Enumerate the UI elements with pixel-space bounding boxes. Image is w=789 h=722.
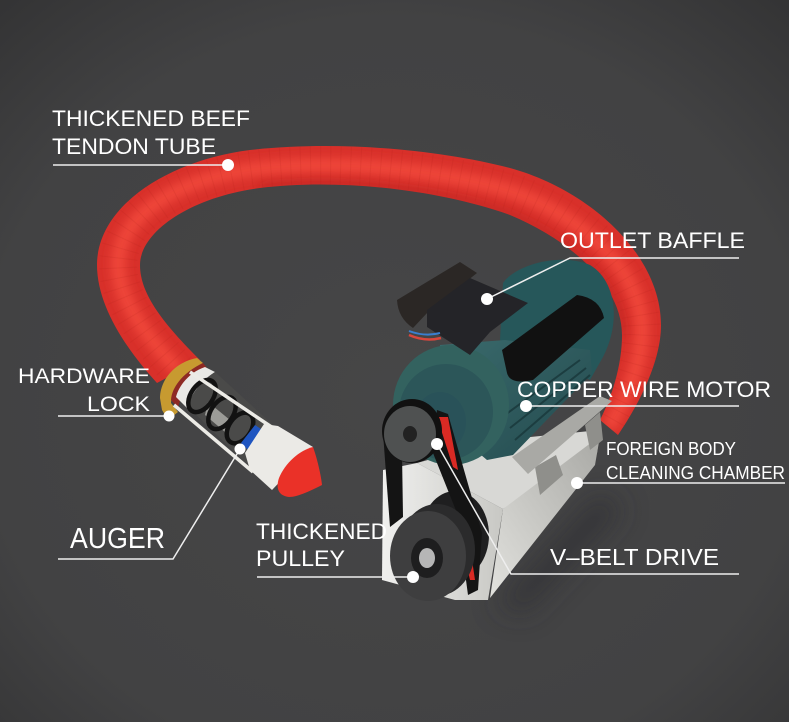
label: thickened pulley — [256, 519, 419, 583]
motor group — [382, 260, 614, 601]
motor rear dome — [500, 260, 614, 380]
label: thickened pulley: THICKENED — [256, 519, 387, 544]
shadow under machine — [495, 490, 625, 615]
label: outlet baffle — [481, 228, 745, 305]
label: hardware lock: HARDWARE — [18, 364, 150, 388]
label: thickened beef tendon tube: TENDON TUBE — [52, 134, 216, 159]
terminal box — [427, 278, 528, 355]
white body — [245, 424, 313, 490]
cage interior — [187, 372, 273, 470]
label: auger: AUGER — [70, 523, 165, 555]
label: hardware lock — [18, 364, 174, 422]
cage rails — [174, 372, 273, 472]
label: thickened beef tendon tube — [52, 106, 250, 171]
label: thickened pulley: PULLEY — [256, 546, 345, 571]
box top — [417, 430, 600, 509]
box left face — [382, 463, 503, 600]
label: foreign body cleaning chamber — [571, 438, 785, 489]
red nose cone — [278, 447, 322, 497]
white collar — [176, 367, 215, 408]
wires — [409, 335, 441, 339]
foot rail — [512, 396, 612, 474]
bottom pulley — [399, 504, 475, 596]
top pulley — [382, 399, 442, 463]
red tube — [97, 146, 661, 435]
hardware lock clamp — [160, 358, 203, 420]
label: foreign body cleaning chamber: FOREIGN BODY — [606, 438, 736, 459]
motor finned body — [440, 340, 592, 460]
mounting bolts — [535, 412, 603, 495]
right belt run — [433, 410, 482, 595]
steel box — [382, 412, 603, 600]
left belt run — [383, 433, 403, 527]
label: hardware lock: LOCK — [87, 392, 151, 416]
label: outlet baffle: OUTLET BAFFLE — [560, 228, 745, 253]
label: copper wire motor: COPPER WIRE MOTOR — [517, 377, 771, 402]
label: v-belt drive — [431, 438, 739, 574]
box right face — [490, 436, 600, 598]
label: auger — [58, 444, 246, 559]
motor fins — [505, 360, 590, 440]
auger spiral — [183, 375, 259, 448]
capacitor front — [502, 295, 604, 381]
label: thickened beef tendon tube: THICKENED BEEF — [52, 106, 250, 131]
capacitor rear — [397, 262, 477, 328]
blue shaft — [241, 425, 264, 452]
auger intake head — [160, 358, 322, 497]
front bell — [393, 345, 509, 465]
label: v-belt drive: V–BELT DRIVE — [550, 544, 719, 570]
bottom pulley rear disc — [421, 491, 489, 579]
